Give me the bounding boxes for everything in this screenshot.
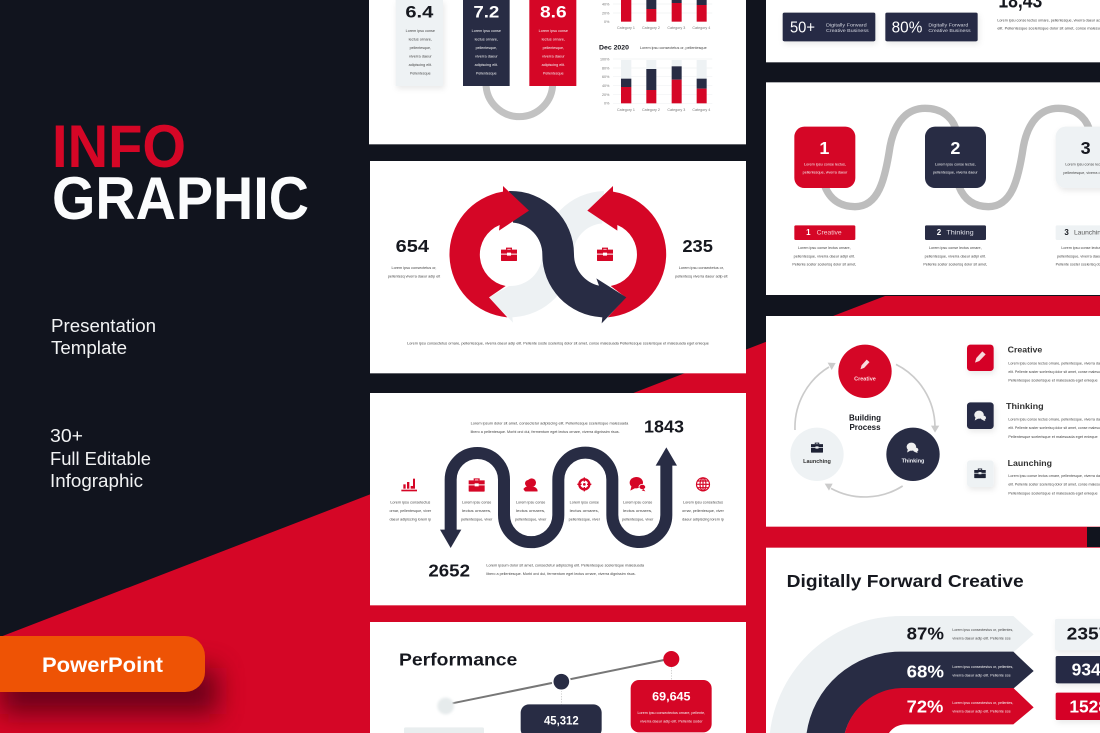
list item: Creative bbox=[1008, 344, 1100, 383]
stat: 654: 654 bbox=[396, 236, 429, 256]
card: 69,645: Lorem ipsu consectectus ornare, pellente, bbox=[637, 711, 705, 715]
text blocks under icons: ornar, pellentesque, viver bbox=[389, 509, 432, 513]
node: Thinking bbox=[886, 428, 940, 481]
feature text: 30+ full editable infographic: 30+ bbox=[50, 425, 83, 446]
list item: Launching: Launching bbox=[1008, 458, 1052, 468]
text blocks under icons: lectus ornares, bbox=[516, 509, 545, 513]
icon: left briefcase bbox=[501, 248, 517, 261]
text blocks under icons: Lorem ipsu conse bbox=[462, 501, 491, 505]
chart: upper stacked bars: 20% bbox=[602, 11, 610, 15]
stat: 654: Lorem ipsu consectetus or, bbox=[391, 266, 436, 270]
badge: 50+: 50+ bbox=[790, 19, 815, 36]
panel: infinity loop arrows bbox=[370, 161, 746, 373]
arc arrow: 87%: Lorem ipsu consectestus or, pellentes, bbox=[952, 628, 1013, 632]
chart: lower stacked bars bbox=[600, 57, 712, 112]
card: 45,312 bbox=[521, 704, 602, 733]
chart: upper stacked bars: 0% bbox=[604, 20, 610, 24]
card: step 1: Lorem ipsu conse lectus, bbox=[804, 162, 846, 166]
marker: red point bbox=[663, 651, 679, 667]
card: 69,645: viverra daeur adip elit. Pellente soder bbox=[640, 719, 703, 723]
column: 7.2: Pellentesque bbox=[476, 72, 497, 76]
arc arrow: 68%: 68% bbox=[907, 662, 944, 682]
text blocks under icons: pellentesque, viver bbox=[515, 517, 547, 521]
text blocks under icons: pellentesque, viver bbox=[569, 517, 601, 521]
pill shadow bbox=[0, 668, 218, 714]
chart: upper stacked bars bbox=[602, 0, 712, 30]
stat: 1843: 1843 bbox=[644, 417, 684, 437]
list item: Creative: Creative bbox=[1008, 344, 1043, 354]
column: 6.4: adipiscing elit. bbox=[409, 63, 432, 67]
stat: 235: pellentesq viverra daeur adip elt bbox=[675, 274, 728, 278]
card: step 2 bbox=[925, 127, 986, 188]
list item: Thinking: Thinking bbox=[1006, 401, 1044, 411]
badge: 50+: Digitally Forward bbox=[826, 23, 867, 29]
column: 6.4: Lorem ipsu conse bbox=[406, 29, 435, 33]
chart heading: Dec 2020 bbox=[599, 45, 707, 52]
feature text: 30+ full editable infographic: Infographic bbox=[50, 470, 143, 491]
panel: building process bbox=[766, 316, 1100, 527]
icon: briefcase bbox=[469, 478, 485, 492]
text under step 2: Pellente soster scelerisq dolor sit amet, bbox=[923, 263, 987, 267]
text blocks under icons: Lorem ipsu consetectus bbox=[683, 501, 723, 505]
stat: 235 bbox=[675, 236, 728, 278]
text under step 2: pellentesque, viverra daeur adipi elit. bbox=[925, 254, 986, 258]
arrow: winding road bbox=[440, 447, 677, 548]
text under step 1: pellentesque, viverra daeur adipi elit. bbox=[794, 254, 855, 258]
card: 45,312: 45,312 bbox=[544, 713, 579, 727]
arc arrow: 72%: Lorem ipsu consectestus or, pellentes, bbox=[952, 701, 1013, 705]
card: step 1: pellentesque, viverra daeur bbox=[803, 171, 848, 175]
value box: 1528 bbox=[1056, 693, 1100, 720]
text blocks under icons: lectus ornares, bbox=[462, 509, 491, 513]
background: red diagonal bbox=[0, 296, 1100, 733]
stat: 654 bbox=[388, 236, 441, 278]
icon: right briefcase bbox=[597, 248, 613, 261]
label: 3 Launching bbox=[1056, 225, 1100, 240]
card: step 3 bbox=[1056, 127, 1100, 188]
card: step 2: 2 bbox=[950, 138, 960, 158]
text blocks under icons: lectus ornares, bbox=[570, 509, 599, 513]
stat: 235: 235 bbox=[682, 236, 713, 256]
arc arrow: 68%: Lorem ipsu consectestus or, pellentes, bbox=[952, 665, 1013, 669]
text blocks under icons: ornar, pellentesque, viver bbox=[682, 509, 725, 513]
chart: lower stacked bars: Category 1 bbox=[617, 108, 635, 112]
light card bbox=[404, 727, 484, 733]
arc arrow: 87%: viverra daeur adip elit. Pellente sce bbox=[952, 636, 1011, 640]
arc arrow: 87% bbox=[770, 616, 1034, 733]
arrow: thinking to launching bbox=[825, 484, 903, 497]
icon: chat bubbles bbox=[630, 477, 646, 491]
column: 6.4: viverra daeur bbox=[409, 54, 432, 58]
text: bottom note: libero a pellentesque. Morbi orci dui, fermentum eget lectus ornare, viverra dignissim risus. bbox=[486, 572, 636, 576]
card: 69,645: 69,645 bbox=[652, 690, 691, 704]
icon: target bbox=[577, 477, 591, 491]
text blocks under icons: Lorem ipsu conse bbox=[516, 501, 545, 505]
wave connector 1 bbox=[825, 108, 956, 207]
label: 1 Creative bbox=[794, 225, 855, 240]
chart: upper stacked bars: Category 2 bbox=[642, 26, 660, 30]
feature text: 30+ full editable infographic: Full Editable bbox=[50, 448, 151, 469]
caption: Lorem ipsu consectetus ornare, pellentesque, viverra daeur adip elit. Pellente soste scelerisq dolor sit amet, conse malesuada Pellentesque scelerisque et malesuada eget enieque bbox=[407, 341, 709, 345]
arc arrow: 68% bbox=[806, 652, 1034, 733]
badge: 80%: Digitally Forward bbox=[928, 23, 969, 29]
column: 8.6: 8.6 bbox=[540, 2, 567, 21]
column: 7.2: lectus ornare, bbox=[475, 37, 498, 41]
subtitle: presentation template: Template bbox=[51, 337, 127, 358]
badge: 80% bbox=[885, 13, 978, 41]
column: 6.4: pellentesque, bbox=[410, 46, 431, 50]
arc arrow: 87%: 87% bbox=[907, 624, 944, 644]
card: step 2: Lorem ipsu conse lectus, bbox=[935, 162, 976, 166]
arrow: right red ring bbox=[587, 186, 666, 317]
arc arrow: 72%: 72% bbox=[907, 697, 943, 717]
node: Thinking: Thinking bbox=[902, 459, 924, 465]
text: stat note: elit. Pellentesque scelerisque dolor sit amet, conse malesu bbox=[997, 27, 1100, 31]
center label: Building Process bbox=[849, 413, 881, 432]
list item: Launching bbox=[1008, 458, 1100, 496]
chart: lower stacked bars: 0% bbox=[604, 102, 610, 106]
list item: Thinking bbox=[1006, 401, 1100, 439]
chart heading: Dec 2020: Dec 2020 bbox=[599, 45, 630, 52]
connector: red dotted bbox=[670, 667, 672, 680]
list item: Launching: Pellentesque scelerisque et malesuada eget enieque bbox=[1008, 492, 1098, 496]
label: 3 Launching: 3 bbox=[1064, 228, 1069, 237]
value box: 9340 bbox=[1056, 656, 1100, 683]
text: bottom note bbox=[486, 564, 645, 576]
chart: lower stacked bars: Category 4 bbox=[692, 108, 710, 112]
chart: upper stacked bars: Category 1 bbox=[617, 26, 635, 30]
chart: upper stacked bars: Category 3 bbox=[667, 26, 685, 30]
subtitle: presentation template: Presentation bbox=[51, 315, 156, 336]
text under step 1: Pellente soster scelerisq dolor sit amet, bbox=[792, 263, 856, 267]
chart: upper stacked bars: 40% bbox=[602, 2, 610, 6]
column: 7.2: 7.2 bbox=[473, 2, 499, 21]
node: Launching bbox=[790, 428, 844, 481]
column: 8.6: viverra daeur bbox=[542, 54, 565, 58]
text blocks under icons: pellentesque, viver bbox=[461, 517, 493, 521]
arrow: launching to creative bbox=[795, 363, 836, 430]
node: Launching: Launching bbox=[803, 459, 831, 465]
column: 7.2: Lorem ipsu conse bbox=[472, 29, 501, 33]
chart: upper stacked bars: Category 4 bbox=[692, 26, 710, 30]
chart: lower stacked bars: 100% bbox=[600, 57, 610, 61]
arc arrow: 72% bbox=[844, 688, 1034, 733]
column: 7.2: pellentesque, bbox=[476, 46, 497, 50]
chart heading: Dec 2020: Lorem ipsu consectetus or, pellentesque bbox=[640, 46, 707, 50]
chart: lower stacked bars: 80% bbox=[602, 66, 610, 70]
text: stat note bbox=[997, 18, 1100, 31]
text blocks under icons: pellentesque, viver bbox=[622, 517, 654, 521]
center label: Building Process: Process bbox=[849, 423, 881, 432]
text blocks under icons: lectus ornares, bbox=[623, 509, 652, 513]
text under step 3 bbox=[1056, 246, 1100, 267]
column: 6.4: lectus ornare, bbox=[409, 37, 432, 41]
column: 7.2: adipiscing elit. bbox=[475, 63, 498, 67]
arrow: left red ring bbox=[449, 186, 529, 317]
wave connector 2 bbox=[959, 108, 1089, 207]
list item: Creative: Pellentesque scelerisque et malesuada eget enieque bbox=[1008, 379, 1098, 383]
marker: light point bbox=[437, 698, 454, 714]
card: step 1: 1 bbox=[819, 138, 829, 158]
badge: 80%: Creative Business bbox=[928, 28, 971, 34]
text blocks under icons: daeur adipiscing lorem ip bbox=[682, 517, 724, 521]
arrow: creative to thinking bbox=[896, 364, 939, 433]
value box: 2357 bbox=[1055, 619, 1100, 650]
text: top note: libero a pellentesque. Morbi orci dui, fermentum eget lectus ornare, viverra dignissim risus. bbox=[471, 430, 620, 434]
icon: bar chart bbox=[401, 479, 417, 491]
chart: lower stacked bars: 40% bbox=[602, 84, 610, 88]
icon: globe bbox=[696, 478, 710, 491]
badge: 50+ bbox=[783, 13, 875, 41]
column: 6.4 bbox=[396, 0, 443, 86]
badge: PowerPoint bbox=[0, 636, 205, 692]
badge: 80%: 80% bbox=[892, 19, 923, 36]
column: 8.6: adipiscing elit. bbox=[542, 63, 565, 67]
connector: dark dotted bbox=[560, 691, 562, 704]
icon: person bbox=[523, 478, 538, 491]
arc arrow: 68%: viverra daeur adip elit. Pellente sce bbox=[952, 673, 1011, 677]
panel: digitally forward creative bbox=[766, 548, 1100, 733]
label: 1 Creative: 1 bbox=[806, 228, 811, 237]
text under step 1 bbox=[792, 246, 856, 267]
title: INFO: INFO bbox=[52, 113, 186, 180]
card: step 1 bbox=[794, 127, 855, 188]
column: 8.6: Lorem ipsu conse bbox=[539, 29, 568, 33]
column: 8.6 bbox=[529, 0, 576, 86]
panel: three step wave bbox=[766, 82, 1100, 295]
cover title block bbox=[52, 113, 309, 232]
node: Creative: Creative bbox=[854, 376, 876, 382]
text under step 1: Lorem ipsu conse lectus ornare, bbox=[798, 246, 851, 250]
list icon: briefcase bbox=[967, 460, 994, 487]
badge: PowerPoint: PowerPoint bbox=[42, 654, 163, 677]
feature text: 30+ full editable infographic bbox=[50, 425, 151, 491]
text blocks under icons: Lorem ipsu conse bbox=[623, 501, 652, 505]
column: 6.4: 6.4 bbox=[405, 2, 434, 21]
label: 2 Thinking: Thinking bbox=[946, 230, 974, 237]
column: 8.6: pellentesque, bbox=[543, 46, 564, 50]
title: GRAPHIC: GRAPHIC bbox=[52, 165, 309, 232]
stat: 235: Lorem ipsu consectetus or, bbox=[679, 266, 724, 270]
chart: lower stacked bars: Category 3 bbox=[667, 108, 685, 112]
chart: lower stacked bars: Category 2 bbox=[642, 108, 660, 112]
text under step 2 bbox=[923, 246, 987, 267]
column: 8.6: Pellentesque bbox=[543, 72, 564, 76]
text blocks under icons: Lorem ipsu conse bbox=[570, 501, 599, 505]
chart: lower stacked bars: 20% bbox=[602, 93, 610, 97]
card: 69,645 bbox=[631, 680, 712, 732]
text: bottom note: Lorem ipsum dolor sit amet, consectetur adipiscing elit. Pellentesque scelerisque malesuada bbox=[486, 564, 645, 568]
arrow: light S curve bbox=[489, 191, 604, 323]
panel: winding road timeline bbox=[370, 393, 746, 605]
list icon: pencil bbox=[967, 345, 994, 371]
text blocks under icons bbox=[389, 501, 725, 521]
panel: performance bbox=[370, 622, 746, 733]
text under step 2: Lorem ipsu conse lectus ornare, bbox=[929, 246, 982, 250]
column: 7.2 bbox=[463, 0, 510, 86]
arrow: dark S curve bbox=[509, 191, 626, 323]
marker: dark point bbox=[553, 673, 570, 690]
text: top note: Lorem ipsum dolor sit amet, consectetur adipiscing elit. Pellentesque scelerisque malesuada bbox=[471, 422, 629, 426]
column: 8.6: lectus ornare, bbox=[542, 37, 565, 41]
list icon: chat bbox=[967, 402, 994, 429]
center label: Building Process: Building bbox=[849, 413, 881, 422]
arc arrow: 72%: viverra daeur adip elit. Pellente sce bbox=[952, 709, 1011, 713]
text blocks under icons: daeur adipiscing lorem ip bbox=[389, 517, 431, 521]
stat: 2652: 2652 bbox=[428, 560, 470, 580]
card: step 3: 3 bbox=[1081, 138, 1091, 158]
panel: score columns and stacked bar charts bbox=[369, 0, 746, 144]
stat: 654: pellentesq viverra daeur adip elt bbox=[388, 274, 441, 278]
badge: 50+: Creative Business bbox=[826, 28, 869, 34]
heading: Performance: Performance bbox=[399, 650, 518, 670]
label: 1 Creative: Creative bbox=[817, 230, 842, 237]
heading: Digitally Forward Creative: Digitally Forward Creative bbox=[787, 571, 1024, 591]
text: top note bbox=[471, 422, 629, 434]
column: 6.4: Pellentesque bbox=[410, 72, 431, 76]
trend line bbox=[452, 660, 664, 703]
chart: lower stacked bars: 60% bbox=[602, 75, 610, 79]
connector: grey arc under columns bbox=[486, 83, 553, 117]
text blocks under icons: Lorem ipsu consetectus bbox=[390, 501, 430, 505]
list item: Thinking: Pellentesque scelerisque et malesuada eget enieque bbox=[1008, 435, 1098, 439]
label: 2 Thinking: 2 bbox=[937, 228, 942, 237]
column: 7.2: viverra daeur bbox=[475, 54, 498, 58]
subtitle: presentation template bbox=[51, 315, 156, 358]
node: Creative bbox=[838, 345, 892, 398]
label: 2 Thinking bbox=[925, 225, 986, 240]
panel: stat badges bbox=[766, 0, 1100, 62]
card: step 2: pellentesque, viverra daeur bbox=[933, 171, 978, 175]
